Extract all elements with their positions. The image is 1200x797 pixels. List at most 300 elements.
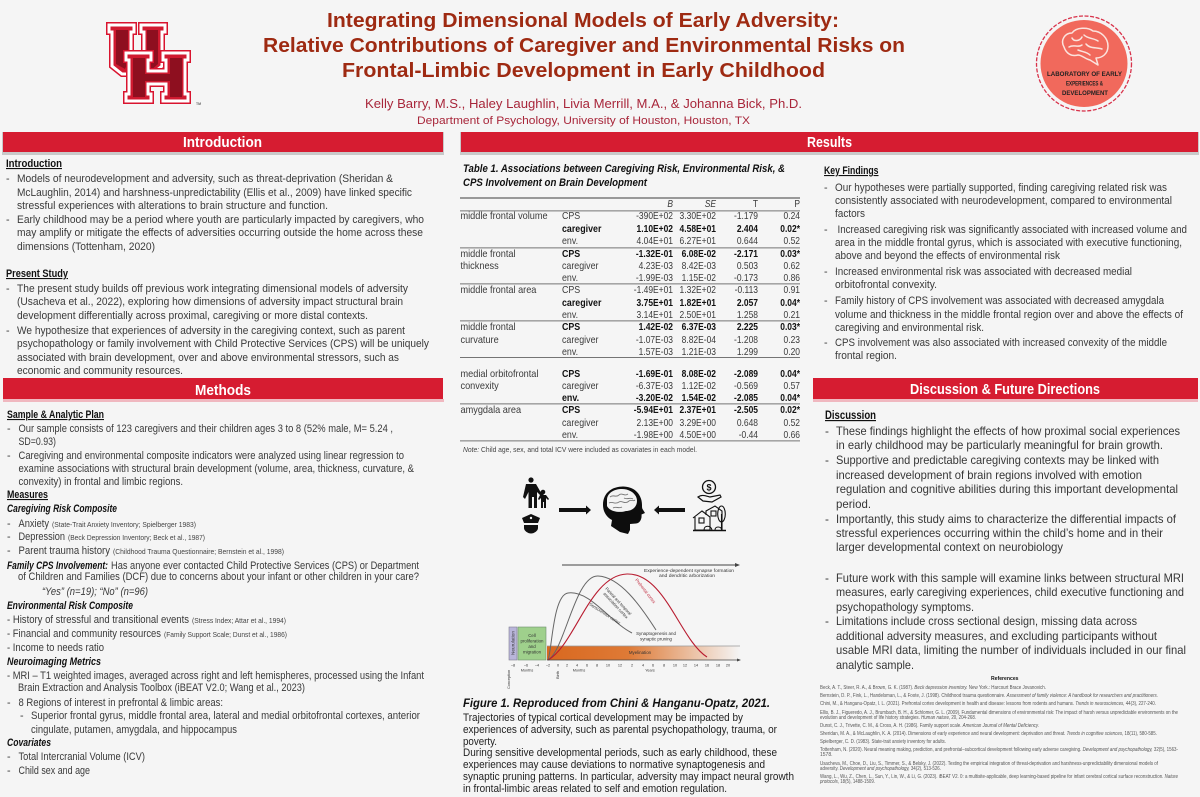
icon: child head with brain bbox=[603, 486, 645, 534]
text block: discussion: Limitations include cross sectional design, missing data across bbox=[836, 614, 1137, 628]
text block: discussion: These findings highlight the effects of how proximal social experiences bbox=[836, 424, 1180, 438]
text block: present study: development differentially across proximal, caregiving or more distal contexts. bbox=[17, 310, 368, 322]
text block: measures: Family CPS Involvement: bbox=[7, 560, 108, 572]
text block: sample and analytic plan: SD=0.93) bbox=[18, 436, 56, 448]
table: brain development associations: 4.23E-03 bbox=[639, 260, 673, 271]
time axis: −8 bbox=[511, 664, 515, 668]
text block: discussion: psychopathology symptoms. bbox=[836, 600, 974, 614]
table: brain development associations: SE bbox=[705, 198, 717, 209]
table: brain development associations: env. bbox=[562, 272, 578, 284]
time axis: 14 bbox=[694, 664, 698, 668]
figure caption: During sensitive developmental periods, such as early childhood, these bbox=[463, 747, 777, 759]
text block: discussion: in early childhood may be particularly meaningful for brain growth. bbox=[836, 438, 1163, 452]
icon: parent and child bbox=[523, 477, 549, 508]
text block: neuroimaging metrics: - MRI – T1 weighted images, averaged across right and left hemispheres, processed using the Infant bbox=[7, 670, 424, 682]
affiliation: Department of Psychology, University of Houston, Houston, TX bbox=[417, 115, 751, 127]
references: Dunst, C. J., Trivette, C. M., & Cross, A. H. (1986). Family support scale. American Journal of Mental Deficiency. bbox=[820, 723, 1039, 729]
text block: introduction: - bbox=[6, 214, 10, 226]
text block: discussion: additional adversity measures, and excluding participants without bbox=[836, 629, 1158, 643]
text block: neuroimaging metrics: Superior frontal gyrus, middle frontal area, lateral and medial orbitofrontal cortexes, anterior bbox=[31, 710, 420, 722]
text block: sample and analytic plan: - bbox=[7, 450, 11, 462]
icon: money and hand: $ bbox=[706, 482, 712, 492]
text block: discussion: usable MRI data, limiting the number of individuals included in our final bbox=[836, 643, 1186, 657]
table: brain development associations: 0.24 bbox=[784, 210, 800, 221]
text block: introduction: - bbox=[6, 173, 10, 185]
text block: present study: economic and community resources. bbox=[17, 365, 183, 377]
table: brain development associations: -0.173 bbox=[734, 272, 758, 283]
table: brain development associations: middle frontal bbox=[460, 322, 516, 333]
table: brain development associations: 2.50E+01 bbox=[680, 309, 716, 320]
table: brain development associations: middle frontal volume bbox=[460, 211, 548, 222]
logo: laboratory of early experiences and development: LABORATORY OF EARLY bbox=[1047, 72, 1122, 78]
table: brain development associations: convexity bbox=[460, 381, 499, 392]
table title: Table 1. Associations between Caregiving Risk, Environmental Risk, & bbox=[463, 163, 785, 175]
text block: measures: (Family Support Scale; Dunst et al., 1986) bbox=[164, 630, 287, 639]
table: brain development associations: -0.44 bbox=[739, 429, 758, 440]
icon: police officer bbox=[522, 514, 540, 534]
figure caption: experiences may cause deviations to normative synaptogenesis and bbox=[463, 759, 765, 771]
table: brain development associations: 1.57E-03 bbox=[639, 346, 673, 357]
table: brain development associations: 1.10E+02 bbox=[637, 223, 673, 234]
table note: Note: Child age, sex, and total ICV were included as covariates in each model. bbox=[463, 445, 697, 454]
logo: laboratory of early experiences and development bbox=[1036, 16, 1132, 111]
table: brain development associations: CPS bbox=[562, 248, 580, 260]
table: brain development associations: 3.29E+00 bbox=[680, 417, 716, 428]
table: brain development associations: medial orbitofrontal bbox=[460, 369, 538, 380]
text block: measures: of Children and Families (DCF) due to concerns about your infant or other children in your care? bbox=[18, 571, 419, 583]
references: Chini, M., & Hanganu-Opatz, I. L. (2021). Prefrontal cortex development in health and disease: lessons from rodents and humans. Trends in neurosciences, 44(3), 227-240. bbox=[820, 701, 1156, 707]
table: brain development associations: caregiver bbox=[562, 334, 599, 346]
time axis: Years bbox=[645, 668, 655, 672]
text block: measures: Anxiety bbox=[18, 518, 50, 530]
synaptogenesis label bbox=[636, 631, 676, 642]
time axis: Birth bbox=[556, 671, 560, 679]
text block: measures: Parent trauma history bbox=[18, 545, 111, 557]
table: brain development associations: 8.82E-04 bbox=[682, 334, 716, 345]
references: protocols, 18(5), 1488-1509. bbox=[819, 779, 875, 785]
text block: neuroimaging metrics: Brain Extraction and Analysis Toolbox (iBEAT V2.0; Wang et al., 2023) bbox=[18, 682, 305, 694]
time axis: 16 bbox=[705, 664, 709, 668]
panel: discussion and future directions bbox=[813, 378, 1198, 672]
references: References bbox=[991, 676, 1018, 682]
table: brain development associations: 2.404 bbox=[737, 223, 759, 234]
heading: results bar: Results bbox=[807, 134, 852, 151]
table: brain development associations: -2.505 bbox=[734, 404, 758, 415]
table: brain development associations: 0.503 bbox=[737, 260, 758, 271]
references: Usacheva, M., Choe, D., Liu, S., Timmer, S., & Belsky, J. (2022). Testing the empirical integration of threat-deprivation and harshness-unpredictability dimensional models of bbox=[820, 761, 1159, 767]
table: brain development associations: 0.52 bbox=[784, 417, 800, 428]
table: brain development associations: 1.12E-02 bbox=[682, 380, 716, 391]
text block: present study: Present Study bbox=[6, 268, 69, 280]
title: Relative Contributions of Caregiver and Environmental Risks on bbox=[263, 34, 905, 57]
text block: discussion: - bbox=[825, 571, 829, 585]
text block: key findings: - bbox=[824, 295, 828, 307]
title: Frontal-Limbic Development in Early Childhood bbox=[342, 59, 825, 82]
cell proliferation box bbox=[518, 627, 546, 660]
text block: neuroimaging metrics: 8 Regions of interest in prefrontal & limbic areas: bbox=[18, 697, 223, 709]
text block: sample and analytic plan: examine associations with structural brain development (volume, area, thickness, curvature, & bbox=[18, 463, 415, 475]
time axis: 4 bbox=[576, 664, 578, 668]
heading: discussion bar: Discussion & Future Directions bbox=[910, 381, 1100, 398]
cell proliferation box: proliferation bbox=[521, 638, 544, 644]
table title bbox=[463, 163, 785, 189]
time axis: 12 bbox=[618, 664, 622, 668]
table: brain development associations: 3.75E+01 bbox=[637, 297, 673, 308]
text block: covariates: - bbox=[7, 765, 11, 777]
text block: measures: - bbox=[7, 545, 11, 557]
text block: measures: (Childhood Trauma Questionnaire; Bernstein et al., 1998) bbox=[113, 547, 284, 556]
text block: discussion: analytic sample. bbox=[836, 658, 914, 672]
table: brain development associations: 1.82E+01 bbox=[680, 297, 716, 308]
table: brain development associations: amygdala area bbox=[460, 405, 522, 416]
table: brain development associations: 0.02* bbox=[780, 223, 800, 234]
time axis: 18 bbox=[716, 664, 720, 668]
text block: discussion: larger developmental context on neurobiology bbox=[836, 540, 1063, 554]
text block: key findings: Key Findings bbox=[824, 165, 878, 177]
text block: discussion: - bbox=[825, 614, 829, 628]
references: Sheridan, M. A., & McLaughlin, K. A. (2014). Dimensions of early experience and neural development: deprivation and threat. Trends in cognitive sciences, 18(11), 580-585. bbox=[820, 731, 1157, 737]
time axis: 10 bbox=[606, 664, 610, 668]
time axis: 4 bbox=[642, 664, 644, 668]
references: adversity. Development and psychopathology, 34(2), 513-526. bbox=[820, 766, 941, 772]
table: brain development associations: 1.299 bbox=[737, 346, 758, 357]
text block: measures: Environmental Risk Composite bbox=[7, 600, 133, 612]
time axis: 8 bbox=[663, 664, 665, 668]
text block: measures: Has anyone ever contacted Child Protective Services (CPS) or Department bbox=[111, 560, 419, 572]
table: brain development associations: 4.58E+01 bbox=[680, 223, 716, 234]
parietal and temporal curve: association cortex bbox=[602, 591, 630, 620]
neurulation box: Neurulation bbox=[510, 630, 516, 655]
table: brain development associations: -0.113 bbox=[735, 284, 758, 295]
table: brain development associations: -1.179 bbox=[734, 210, 758, 221]
time axis: 6 bbox=[652, 664, 654, 668]
time axis: −4 bbox=[535, 664, 539, 668]
time axis: 10 bbox=[673, 664, 677, 668]
time axis: Months bbox=[521, 668, 533, 672]
table: brain development associations: 0.04* bbox=[780, 392, 800, 403]
logo: University of Houston interlocking UH bbox=[109, 25, 201, 106]
references: evolution and development of life history strategies. Human nature, 20, 204-268. bbox=[820, 715, 976, 721]
table: brain development associations: -0.569 bbox=[734, 380, 758, 391]
text block: neuroimaging metrics: - bbox=[20, 710, 24, 722]
table title: CPS Involvement on Brain Development bbox=[463, 177, 648, 189]
table: brain development associations: 2.225 bbox=[737, 321, 758, 332]
table: brain development associations: -3.20E-02 bbox=[636, 392, 673, 403]
text block: sample and analytic plan: Caregiving and environmental composite indicators were analyzed using linear regression to bbox=[18, 450, 404, 462]
text block: key findings: consistently associated with neurodevelopment, compared to environmental bbox=[835, 195, 1172, 207]
table: brain development associations: 1.54E-02 bbox=[682, 392, 716, 403]
table: brain development associations: env. bbox=[562, 309, 578, 321]
table: brain development associations: 0.23 bbox=[784, 334, 800, 345]
table: brain development associations: 6.27E+01 bbox=[680, 235, 716, 246]
neurulation box bbox=[509, 627, 517, 660]
text block: introduction: may amplify or mitigate the effects of adversities occurring outside the home across these bbox=[17, 227, 423, 239]
text block: key findings: - bbox=[824, 266, 828, 278]
myelination band bbox=[547, 646, 740, 660]
table: brain development associations: 8.42E-03 bbox=[682, 260, 716, 271]
text block: measures: Measures bbox=[7, 489, 48, 501]
table: brain development associations: 0.86 bbox=[784, 272, 800, 283]
table: brain development associations: 0.02* bbox=[780, 404, 800, 415]
heading: discussion bar bbox=[813, 378, 1198, 402]
text block: measures: - Income to needs ratio bbox=[7, 642, 104, 654]
text block: key findings: Family history of CPS involvement was associated with decreased amygdala bbox=[835, 295, 1164, 307]
logo: laboratory of early experiences and development: EXPERIENCES & bbox=[1066, 82, 1104, 88]
table: brain development associations: env. bbox=[562, 392, 579, 404]
text block: key findings: caregiving and environmental risk. bbox=[835, 322, 984, 334]
table: brain development associations: env. bbox=[562, 429, 578, 441]
table: brain development associations: 0.57 bbox=[784, 380, 800, 391]
text block: discussion: - bbox=[825, 512, 829, 526]
table: brain development associations: 0.04* bbox=[780, 368, 800, 379]
authors: Kelly Barry, M.S., Haley Laughlin, Livia Merrill, M.A., & Johanna Bick, Ph.D. bbox=[365, 97, 802, 111]
experience-dependent arrow and label: and dendritic arborization bbox=[659, 573, 716, 578]
text block: discussion: Supportive and predictable caregiving contexts may be linked with bbox=[836, 453, 1159, 467]
sensorimotor curve bbox=[548, 593, 632, 660]
experience-dependent arrow and label bbox=[562, 563, 740, 578]
text block: key findings: - bbox=[824, 337, 828, 349]
table: brain development associations: thickness bbox=[460, 261, 499, 272]
table: brain development associations bbox=[460, 197, 800, 441]
text block: present study bbox=[6, 268, 430, 377]
text block: key findings: orbitofrontal convexity. bbox=[835, 279, 937, 291]
table: brain development associations: -1.49E+01 bbox=[634, 284, 673, 295]
table: brain development associations: -1.32E-01 bbox=[636, 248, 673, 259]
time axis: −2 bbox=[546, 664, 550, 668]
text block: measures: - Financial and community resources bbox=[7, 628, 162, 640]
table: brain development associations: 0.21 bbox=[784, 309, 800, 320]
table: brain development associations: curvature bbox=[460, 335, 499, 346]
text block: discussion: Future work with this sample will examine links between structural MRI bbox=[836, 571, 1184, 585]
arrow: caregiver to brain bbox=[559, 506, 591, 514]
prefrontal curve bbox=[548, 574, 707, 660]
table: brain development associations: caregiver bbox=[562, 260, 599, 272]
table: brain development associations: -1.07E-03 bbox=[636, 334, 673, 345]
sensorimotor curve: Sensorimotor cortex bbox=[588, 602, 622, 626]
logo: laboratory of early experiences and development: DEVELOPMENT bbox=[1062, 91, 1108, 97]
text block: sample and analytic plan: Our sample consists of 123 caregivers and their children ages 3 to 8 (52% male, M= 5.24 , bbox=[18, 423, 393, 435]
text block: measures: Depression bbox=[18, 531, 65, 543]
heading: methods bar bbox=[3, 378, 444, 402]
icon: money and hand bbox=[698, 480, 721, 502]
text block: covariates: Total Intercranial Volume (ICV) bbox=[18, 751, 145, 763]
table: brain development associations: -2.089 bbox=[734, 368, 758, 379]
figure caption bbox=[463, 696, 794, 795]
text block: discussion: measures, early caregiving experiences, child executive functioning and bbox=[836, 585, 1184, 599]
text block: key findings: above and beyond the effects of environmental risk bbox=[835, 250, 1061, 262]
text block: key findings: CPS involvement was also associated with increased convexity of the middle bbox=[835, 337, 1167, 349]
text block: neuroimaging metrics: Neuroimaging Metrics bbox=[7, 656, 101, 668]
text block: measures: - bbox=[7, 518, 11, 530]
table: brain development associations: 0.648 bbox=[737, 417, 758, 428]
table: brain development associations: CPS bbox=[562, 210, 580, 222]
panel: introduction bbox=[2, 132, 444, 377]
text block: discussion: Discussion bbox=[825, 408, 876, 422]
heading: introduction bar: Introduction bbox=[183, 134, 262, 151]
text block: covariates: - bbox=[7, 751, 11, 763]
table: brain development associations: 3.14E+01 bbox=[637, 309, 673, 320]
text block: neuroimaging metrics: - bbox=[7, 697, 11, 709]
references bbox=[819, 676, 1178, 785]
text block: key findings: volume and thickness in the middle frontal region over and above the effects of bbox=[835, 309, 1184, 321]
time axis: 0 bbox=[557, 664, 559, 668]
text block: introduction: Early childhood may be a period where youth are particularly impacted by caregivers, who bbox=[17, 214, 424, 226]
time axis bbox=[507, 658, 741, 689]
text block: present study: - bbox=[6, 325, 10, 337]
table: brain development associations: 0.62 bbox=[784, 260, 800, 271]
text block: measures: (Beck Depression Inventory; Beck et al., 1987) bbox=[68, 533, 205, 542]
arrow: environment to brain bbox=[654, 506, 685, 514]
table: brain development associations: 8.08E-02 bbox=[682, 368, 716, 379]
text block: present study: (Usacheva et al., 2022), exploring how dimensions of adversity impact structural brain bbox=[17, 296, 403, 308]
text block: discussion: regulation and cognitive abilities during this important developmental bbox=[836, 482, 1178, 496]
parietal and temporal curve bbox=[548, 576, 656, 660]
figure caption: Trajectories of typical cortical development may be impacted by bbox=[463, 712, 744, 724]
text block: key findings: - bbox=[824, 224, 828, 236]
synaptogenesis label: synaptic pruning bbox=[640, 636, 673, 642]
table: brain development associations: -5.94E+01 bbox=[634, 404, 673, 415]
text block: sample and analytic plan: Sample & Analytic Plan bbox=[7, 409, 104, 421]
table: brain development associations: middle frontal area bbox=[460, 285, 537, 296]
parietal and temporal curve: Parietal and temporal bbox=[604, 586, 632, 616]
title: Integrating Dimensional Models of Early Adversity: bbox=[327, 9, 839, 32]
table: brain development associations: caregiver bbox=[562, 380, 599, 392]
time axis: 2 bbox=[631, 664, 633, 668]
table: brain development associations: middle frontal bbox=[460, 249, 516, 260]
table: brain development associations: 0.03* bbox=[780, 321, 800, 332]
text block: measures: Caregiving Risk Composite bbox=[7, 503, 117, 515]
myelination band: Myelination bbox=[629, 650, 652, 655]
references: Wang, L., Wu, Z., Chen, L., Sun, Y., Lin, W., & Li, G. (2023). iBEAT V2. 0: a multisite-applicable, deep learning-based pipeline for infant cerebral cortical surface reconstruction. Nature bbox=[820, 774, 1178, 780]
table: brain development associations: -2.171 bbox=[734, 248, 758, 259]
table: brain development associations: caregiver bbox=[562, 297, 602, 309]
text block: neuroimaging metrics bbox=[7, 656, 424, 736]
synaptogenesis label: Synaptogenesis and bbox=[636, 631, 676, 636]
time axis: 12 bbox=[683, 664, 687, 668]
text block: measures: - History of stressful and transitional events bbox=[7, 614, 190, 626]
text block: key findings: Our hypotheses were partially supported, finding caregiving related risk was bbox=[835, 182, 1168, 194]
heading: results bar bbox=[460, 132, 1199, 155]
text block: sample and analytic plan: convexity) in frontal and limbic regions. bbox=[18, 476, 183, 488]
table: brain development associations: 0.03* bbox=[780, 248, 800, 259]
text block: measures: - bbox=[7, 531, 11, 543]
time axis: 20 bbox=[726, 664, 730, 668]
table: brain development associations: 1.32E+02 bbox=[680, 284, 716, 295]
text block: discussion: Importantly, this study aims to characterize the differential impacts of bbox=[836, 512, 1177, 526]
text block: sample and analytic plan bbox=[7, 409, 415, 488]
table: brain development associations: 2.057 bbox=[737, 297, 758, 308]
text block: discussion bbox=[825, 408, 1186, 672]
cell proliferation box: migration bbox=[523, 650, 542, 654]
table: brain development associations: 0.20 bbox=[784, 346, 800, 357]
time axis: 8 bbox=[596, 664, 598, 668]
table: brain development associations: 1.42E-02 bbox=[639, 321, 673, 332]
table: brain development associations: B bbox=[667, 198, 673, 209]
table: brain development associations: 4.50E+00 bbox=[680, 429, 716, 440]
text block: discussion: stressful experiences occurring within the child’s home and in their bbox=[836, 526, 1163, 540]
text block: introduction: McLaughlin, 2014) and harshness-unpredictability (Ellis et al., 2009) have linked specific bbox=[17, 187, 413, 199]
table: brain development associations: -1.208 bbox=[734, 334, 758, 345]
table: brain development associations: 2.37E+01 bbox=[680, 404, 716, 415]
title bbox=[263, 9, 905, 82]
text block: sample and analytic plan: - bbox=[7, 423, 11, 435]
text block: introduction: stressful experiences with alterations to brain structure and function. bbox=[17, 200, 328, 212]
figure caption: poverty. bbox=[463, 736, 497, 748]
table: brain development associations: caregiver bbox=[562, 223, 602, 235]
text block: present study: psychopathology or family involvement with Child Protective Services (CPS) will be uniquely bbox=[17, 338, 430, 350]
references: Spielberger, C. D. (1983). State-trait anxiety inventory for adults. bbox=[820, 739, 946, 745]
text block: measures bbox=[7, 489, 419, 654]
text block: introduction bbox=[6, 158, 424, 253]
heading: methods bar: Methods bbox=[195, 382, 251, 399]
text block: discussion: increased development of brain regions involved with emotion bbox=[836, 468, 1142, 482]
text block: key findings: - bbox=[824, 182, 828, 194]
experience-dependent arrow and label: Experience-dependent synapse formation bbox=[644, 568, 735, 573]
text block: introduction: Models of neurodevelopment and adversity, such as threat-deprivation (Sheridan & bbox=[17, 173, 394, 185]
text block: key findings: factors bbox=[835, 208, 866, 220]
text block: covariates bbox=[7, 737, 145, 777]
table: brain development associations: env. bbox=[562, 235, 578, 247]
text block: key findings bbox=[824, 165, 1187, 362]
text block: introduction: dimensions (Tottenham, 2020) bbox=[17, 241, 155, 253]
time axis: −6 bbox=[524, 664, 528, 668]
text block: present study: We hypothesize that experiences of adversity in the caregiving context, such as parent bbox=[17, 325, 405, 337]
text block: measures: “Yes” (n=19); “No” (n=96) bbox=[42, 586, 148, 598]
table: brain development associations: 1.15E-02 bbox=[682, 272, 716, 283]
table: brain development associations: -1.69E-01 bbox=[636, 368, 673, 379]
prefrontal curve: Prefrontal cortex bbox=[634, 578, 657, 605]
time axis: 6 bbox=[586, 664, 588, 668]
table: brain development associations: CPS bbox=[562, 284, 580, 296]
text block: key findings: frontal region. bbox=[835, 350, 897, 362]
references: Bernstein, D. P., Fink, L., Handelsman, L., & Foote, J. (1998). Childhood trauma questionnaire. Assessment of family violence: A handbook for researchers and practitioners. bbox=[820, 693, 1158, 699]
figure caption: Figure 1. Reproduced from Chini & Hanganu-Opatz, 2021. bbox=[463, 696, 770, 710]
table: brain development associations: T bbox=[753, 198, 758, 209]
table: brain development associations: CPS bbox=[562, 368, 580, 380]
table: brain development associations: 6.37E-03 bbox=[682, 321, 716, 332]
text block: discussion: - bbox=[825, 453, 829, 467]
text block: present study: associated with brain development, over and above environmental stressors, such as bbox=[17, 352, 400, 364]
references: 1578. bbox=[820, 752, 833, 758]
text block: discussion: period. bbox=[836, 497, 871, 511]
table: brain development associations: env. bbox=[562, 346, 578, 358]
text block: discussion: - bbox=[825, 424, 829, 438]
figure caption: experiences of adversity, such as parental psychopathology, trauma, or bbox=[463, 724, 777, 736]
table: brain development associations: 0.644 bbox=[737, 235, 758, 246]
time axis: Months bbox=[573, 668, 585, 672]
text block: present study: The present study builds off previous work integrating dimensional models of adversity bbox=[17, 283, 409, 295]
table: brain development associations: CPS bbox=[562, 321, 580, 333]
table: brain development associations: 0.04* bbox=[780, 297, 800, 308]
table: brain development associations: 1.21E-03 bbox=[682, 346, 716, 357]
text block: covariates: Child sex and age bbox=[18, 765, 90, 777]
table: brain development associations: -390E+02 bbox=[636, 210, 673, 221]
table: brain development associations: P bbox=[794, 198, 800, 209]
table: brain development associations: 0.52 bbox=[784, 235, 800, 246]
text block: measures: (Stress Index; Attar et al., 1994) bbox=[192, 616, 286, 625]
table: brain development associations: -1.99E-03 bbox=[636, 272, 673, 283]
table: brain development associations: 4.04E+01 bbox=[637, 235, 673, 246]
table: brain development associations: 2.13E+00 bbox=[637, 417, 673, 428]
table: brain development associations: -6.37E-03 bbox=[636, 380, 673, 391]
table: brain development associations: 0.91 bbox=[784, 284, 800, 295]
table: brain development associations: -1.98E+00 bbox=[634, 429, 673, 440]
chart: typical cortical development trajectories bbox=[507, 563, 741, 689]
time axis: 2 bbox=[566, 664, 568, 668]
text block: introduction: Introduction bbox=[6, 158, 62, 170]
logo: University of Houston interlocking UH: TM bbox=[196, 102, 201, 106]
table: brain development associations: caregiver bbox=[562, 417, 599, 429]
